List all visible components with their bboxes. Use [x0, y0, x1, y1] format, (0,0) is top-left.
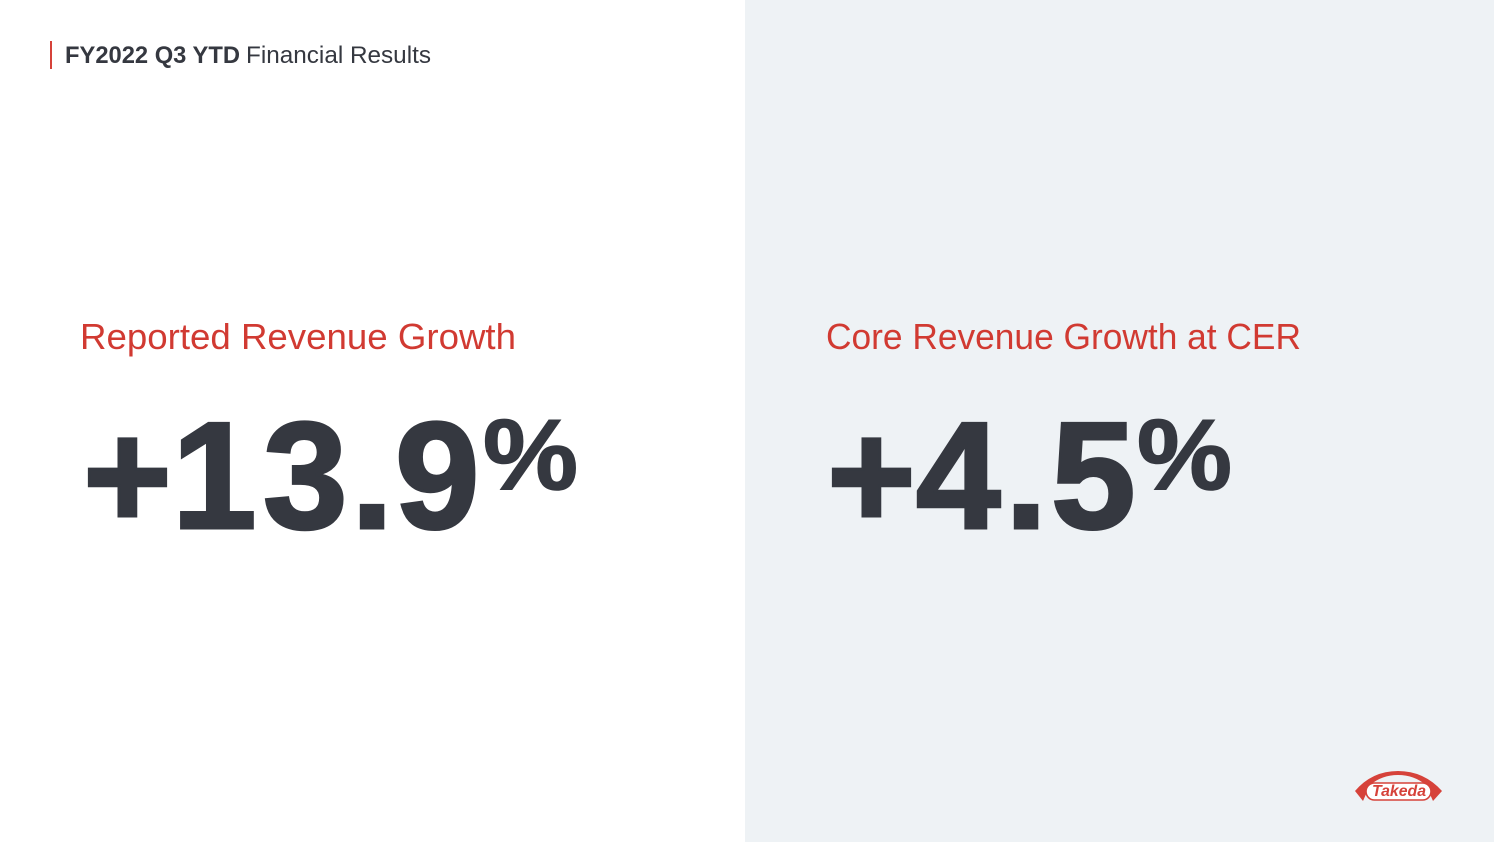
panel: core revenue label: Core Revenue Growth at CER — [826, 316, 1301, 357]
header accent bar — [50, 41, 52, 69]
heading: slide title: FY2022 Q3 YTD — [65, 42, 240, 69]
heading: slide title — [65, 42, 431, 69]
stat: core revenue growth value: % — [1137, 399, 1232, 511]
stat: reported revenue growth value: % — [483, 399, 578, 511]
panel: reported revenue label: Reported Revenue Growth — [80, 316, 516, 357]
panel: right background — [745, 0, 1494, 842]
icon: Takeda logo: Takeda — [1372, 783, 1426, 800]
stat: core revenue growth value: +4.5 — [827, 391, 1136, 561]
icon: Takeda logo — [1355, 771, 1442, 801]
heading: slide title: Financial Results — [246, 42, 431, 69]
stat: reported revenue growth value: +13.9 — [83, 391, 480, 561]
